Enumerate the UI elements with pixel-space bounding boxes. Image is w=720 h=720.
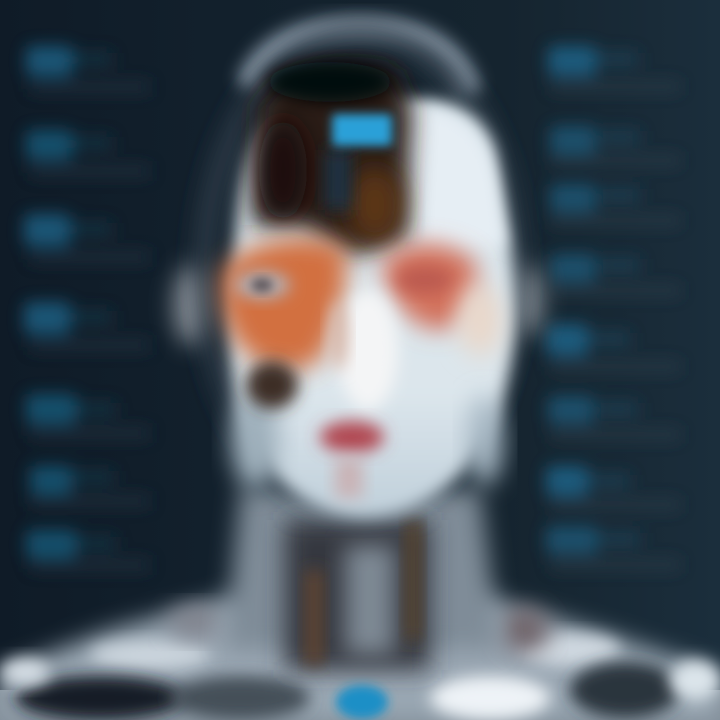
label column: left [24, 46, 150, 570]
right eye region [382, 244, 477, 330]
head outline glow [205, 35, 515, 505]
under-eye shadow [246, 361, 298, 409]
ears [174, 264, 542, 345]
lower-left jaw shading [231, 390, 279, 490]
lower-right jaw shading [467, 395, 503, 485]
chin shadow [335, 458, 363, 498]
helmet arc [250, 27, 468, 85]
face [221, 62, 515, 518]
label column: right [546, 46, 680, 569]
left eye region [221, 238, 346, 368]
forehead: right white panel [410, 109, 505, 250]
lips [320, 421, 384, 453]
neck [225, 490, 500, 719]
nose-side shading [328, 300, 348, 370]
shoulders [0, 595, 720, 720]
forehead badge [332, 114, 392, 146]
nose [338, 290, 398, 410]
hair: dark top [252, 64, 412, 255]
